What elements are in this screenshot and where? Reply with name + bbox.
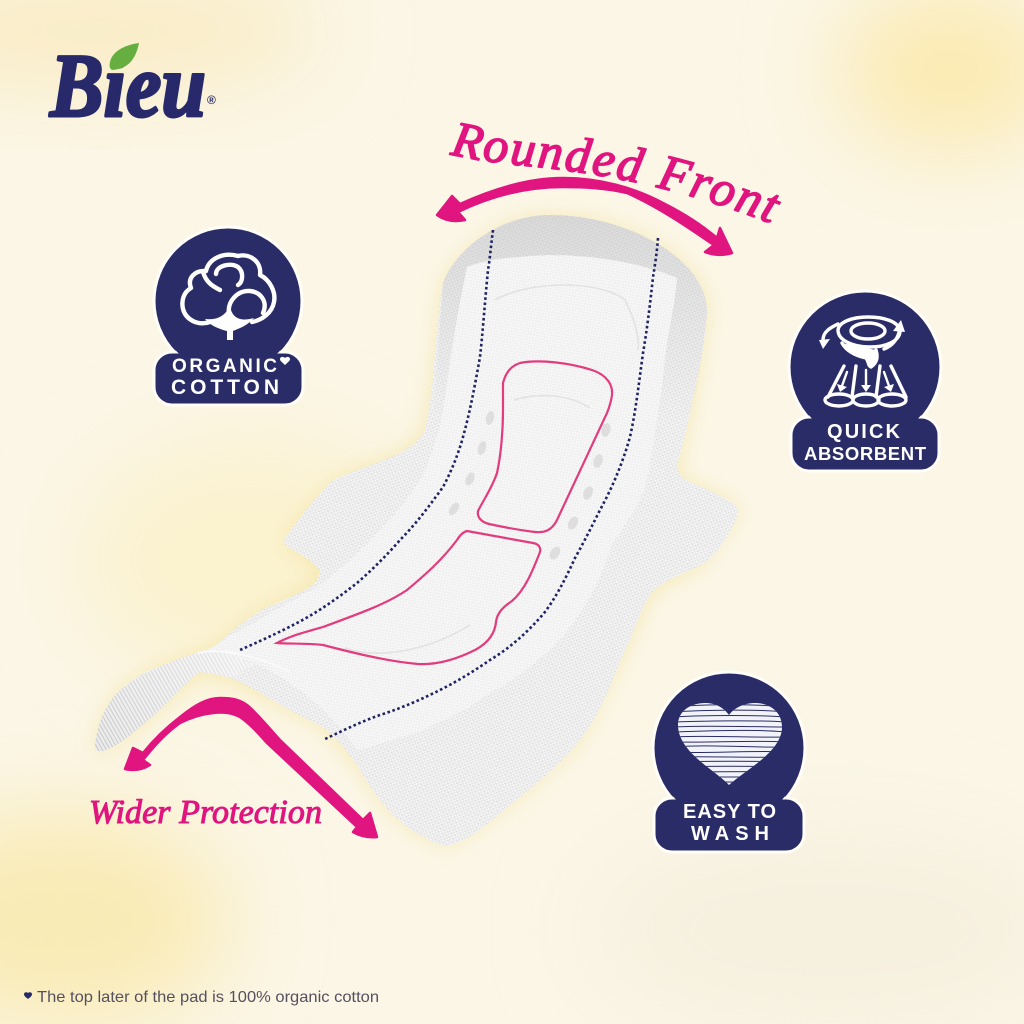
badge: quick absorbent [789,291,941,471]
arrow: wider protection [125,698,377,837]
pad head shading [433,215,707,420]
footnote text: The top later of the pad is 100% organic cotton [37,989,379,1006]
icon: cotton boll [182,255,274,340]
badge: organic cotton [154,227,303,405]
arrow: rounded front [437,178,732,255]
pad front fold flap [95,652,255,751]
heading: wider protection: Wider Protection [89,794,322,831]
footnote [24,989,379,1006]
label: easy to wash: EASY TO [683,801,776,823]
badge: organic cotton: COTTON [171,376,279,399]
icon: leaf [110,43,139,70]
label: quick absorbent: QUICK [827,421,901,443]
label: organic cotton: ORGANIC [172,356,277,377]
stitching: left dotted line [240,230,493,650]
badge shape [653,672,805,852]
badge: easy to wash: WASH [691,823,769,845]
logo [49,37,216,136]
badge shape [154,227,303,405]
stitching: right dotted line [323,238,658,740]
embossed dots [447,410,612,561]
sanitary pad [95,215,738,845]
heading: rounded front: Rounded Front [448,122,782,223]
pink channel: upper [478,361,612,532]
badge: easy to wash [653,672,805,852]
pad glow [95,216,738,845]
pad outer layer [95,215,738,845]
registered mark: ® [207,93,216,107]
pink channel: lower [277,531,540,664]
icon: fingerprint heart [678,703,782,785]
logo wordmark: Bieu [49,37,206,136]
icon: absorption funnel [823,317,906,406]
badge: quick absorbent: ABSORBENT [804,443,927,464]
embossed arcs [345,285,638,653]
icon: bullet heart [24,992,32,999]
pad inner layer [205,255,677,750]
pad crease highlight [197,651,290,672]
badge shape [789,291,941,471]
icon: small heart [280,357,290,365]
